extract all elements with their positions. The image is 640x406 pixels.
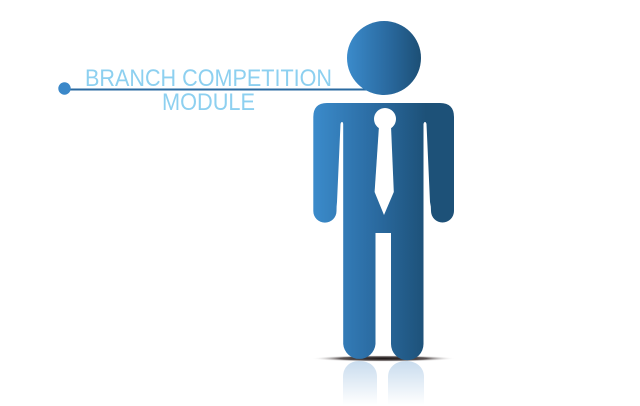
- person icon: [313, 21, 454, 360]
- suit body: [313, 103, 454, 360]
- floor shadow: [312, 355, 456, 362]
- leader line: [65, 88, 375, 90]
- head: [347, 21, 421, 95]
- tie: [374, 108, 396, 215]
- label: branch competition module: MODULE: [162, 89, 255, 116]
- leader dot: [58, 82, 71, 95]
- label: branch competition module: BRANCH COMPETITION: [85, 65, 332, 92]
- label: branch competition module: [85, 65, 332, 116]
- leg reflections: [343, 361, 424, 405]
